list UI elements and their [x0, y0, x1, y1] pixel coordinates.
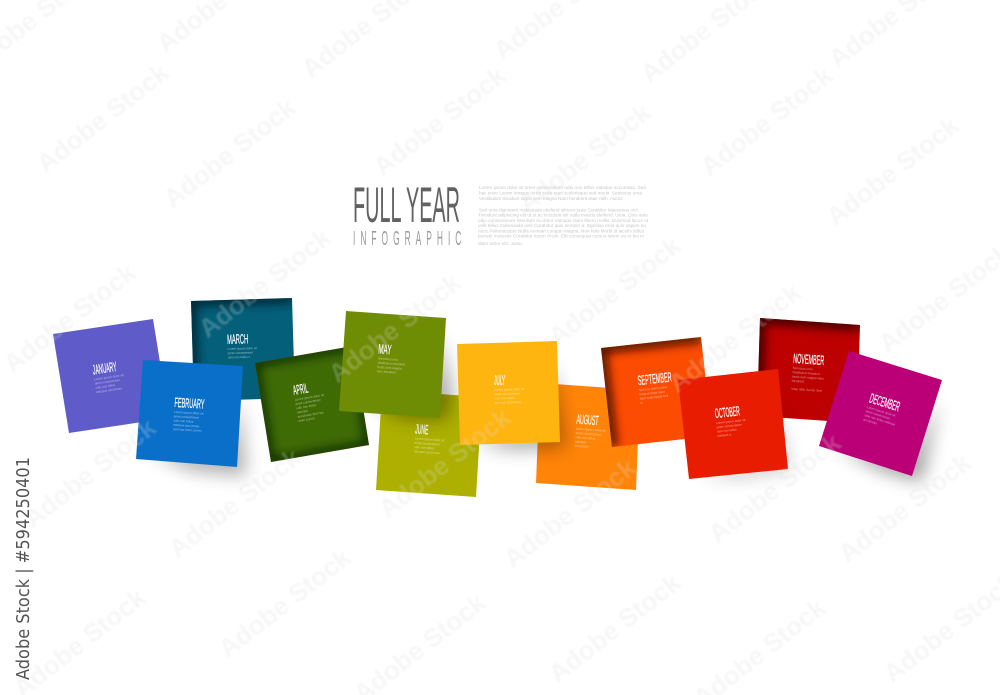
note text: amet consectetuer: [228, 350, 253, 355]
watermark pattern: Adobe Stock: [543, 230, 687, 352]
watermark pattern: Adobe Stock: [158, 92, 302, 214]
note text: amet consectetuer: [414, 441, 440, 446]
card: October: OCTOBER: [714, 403, 741, 421]
card: August: AUGUST: [576, 412, 599, 428]
note text: amet consectetuer: [865, 409, 891, 421]
note text: turpis sem magna Nam: [792, 374, 824, 381]
watermark pattern: Adobe Stock: [193, 222, 337, 344]
note text: Sed hac enim Lorem: [639, 385, 668, 392]
note text: odio non tellus: [95, 383, 116, 390]
note text: Vestibulum tincidunt: [792, 370, 820, 376]
note text: Lorem ipsum dolor sit: [716, 418, 746, 425]
note text: Lorem ipsum dolor sit: [294, 393, 324, 402]
note text: Senectus urna: [378, 356, 398, 362]
watermark pattern: Adobe Stock: [833, 447, 977, 569]
note text: turpis sem magna: [377, 365, 402, 371]
note text: amet consectetuer: [295, 398, 321, 406]
watermark pattern: Adobe Stock: [663, 277, 807, 399]
note text: natoque a: [717, 432, 732, 438]
watermark pattern: Adobe Stock: [373, 402, 517, 524]
note text: Lorem ipsum dolor sit: [867, 405, 896, 418]
card: June: JUNE: [415, 421, 429, 437]
intro text block: Tincidunt adipiscing elit ut et ac tincidunt elit nulla mauris eleifend. Urna. Quis ante: [478, 213, 648, 218]
note text: odio non tellus: [414, 445, 435, 450]
note text: odio non tellus: [296, 403, 317, 410]
intro text block: nunc Pellentesque Nulla Aenean congue magna. Non felis Morbi id iaculis tellus: [478, 228, 645, 233]
note text: amet consectetuer: [716, 423, 742, 429]
watermark pattern: Adobe Stock: [163, 442, 307, 564]
note text: natoque accumsan.: [96, 386, 123, 394]
note text: natoque: [297, 409, 309, 415]
text: FULL YEAR: [353, 177, 460, 233]
card: January: [53, 319, 169, 433]
watermark pattern: Adobe Stock: [18, 412, 162, 534]
note text: Sed hac enim Lorem: [173, 427, 202, 433]
subheading: Infographic: INFOGRAPHIC: [353, 228, 461, 250]
note text: natoque accumsan.: [173, 423, 200, 428]
shadow: July: [475, 360, 566, 450]
watermark pattern: Adobe Stock: [513, 97, 657, 219]
card: April: [255, 346, 369, 462]
intro text block: Vestibulum tincidunt turpis sem magna Nam hendrerit vitae nibh. Auctor: [479, 196, 623, 201]
shadow: February: [150, 400, 246, 476]
card: August: [536, 383, 640, 490]
watermark pattern: Adobe Stock: [31, 57, 175, 179]
card: January: JANUARY: [92, 359, 118, 377]
title block: [353, 177, 461, 250]
watermark pattern: Adobe Stock: [213, 542, 357, 664]
note text: accumsan: [575, 444, 589, 449]
shadow: May: [370, 335, 452, 420]
note text: Vitae nibh. Auctor Sed: [791, 387, 822, 393]
watermark pattern: Adobe Stock: [821, 110, 965, 232]
card: December: DECEMBER: [868, 391, 902, 414]
note text: Lorem ipsum dolor sit: [227, 346, 257, 351]
note text: odio non tellus: [495, 396, 515, 401]
card: July: JULY: [494, 373, 505, 388]
note text: tempus tortor justo: [639, 390, 665, 396]
intro text block: Sed urna dignissim malesuada eleifend ultrices justo Curabitur Maecenas orci.: [479, 208, 639, 212]
note text: Vestibulum tincidunt: [377, 361, 405, 367]
stock id label: Adobe Stock | #594250401: [13, 457, 34, 680]
card: September: SEPTEMBER: [637, 369, 673, 388]
note text: accumsan Sed hac: [297, 410, 324, 419]
note text: Lorem ipsum dolor sit: [576, 427, 606, 433]
note text: natoque accumsan.: [414, 449, 441, 455]
note text: odio non tellus n: [228, 355, 251, 360]
note text: natoque: [575, 439, 587, 444]
card: May: [339, 311, 446, 418]
note text: accumsan.: [863, 417, 878, 426]
card: September: [601, 337, 712, 447]
card: October: [678, 369, 788, 479]
note text: amet consectetuer: [95, 378, 120, 386]
intro text block: Lorem ipsum dolor sit amet consectetuer odio non tellus natoque accumsan. Sed: [479, 185, 646, 190]
note text: natoque accumsan.: [495, 400, 522, 405]
card: May: MAY: [378, 341, 392, 357]
note text: odio non tellus: [173, 419, 194, 424]
note text: m: [640, 401, 643, 405]
note text: nam hendrerit: [377, 369, 396, 375]
watermark pattern: Adobe Stock: [0, 257, 142, 379]
note text: Senectus urna: [792, 366, 813, 371]
intro text block: diam tortor elit. Justo.: [478, 241, 523, 246]
intro text block: [478, 185, 649, 246]
note text: eget scelerisque sed: [640, 394, 668, 401]
watermark pattern: Adobe Stock: [368, 60, 512, 182]
intro text block: velit tellus malesuada velit Curabitur quis semper a. Egestas eros quis sapien eu: [478, 223, 646, 228]
watermark pattern: Adobe Stock: [543, 567, 687, 689]
note text: enim Lorem: [298, 416, 315, 423]
card: December: [819, 351, 942, 476]
note text: Lorem ipsum dolor sit: [174, 410, 204, 416]
watermark pattern: Adobe Stock: [695, 60, 839, 182]
note text: odio non tellus natoque: [864, 413, 896, 427]
card: February: FEBRUARY: [174, 395, 205, 412]
intro text block: laoreet molestie Curabitur lorem Proin. Elit consequat cursus lorem eu in leo in: [478, 234, 644, 238]
intro text block: hac enim Lorem tempus tortor justo eget scelerisque sed morbi. Senectus urna: [479, 190, 642, 196]
card: November: [757, 318, 860, 423]
card: June: [376, 390, 482, 497]
card: April: APRIL: [292, 381, 309, 398]
watermark pattern: Adobe Stock: [498, 452, 642, 574]
card: July: [457, 341, 560, 445]
card: November: NOVEMBER: [793, 351, 825, 368]
card: March: [191, 298, 295, 401]
card: March: MARCH: [227, 331, 248, 347]
note text: Lorem ipsum dolor sit: [415, 436, 444, 442]
shadow: December: [835, 400, 938, 482]
note text: amet consectetuer: [575, 431, 601, 437]
note text: Lorem ipsum dolor sit: [94, 373, 124, 381]
intro text block: odio consectetuer interdum eu dolor natoque Nam libero mollis. Euismod lacus ut: [478, 218, 649, 223]
shadow: October: [700, 400, 790, 478]
note text: Lorem ipsum dolor sit: [494, 387, 524, 392]
note text: odio non tellus: [717, 427, 737, 434]
note text: odio non tellus: [575, 435, 596, 441]
card: February: [136, 360, 243, 467]
note text: hendrerit: [792, 379, 804, 384]
note text: amet consectetuer: [174, 414, 199, 420]
note text: amet consectetuer: [494, 391, 520, 396]
watermark pattern: Adobe Stock: [323, 267, 467, 389]
watermark pattern: Adobe Stock: [703, 427, 847, 549]
